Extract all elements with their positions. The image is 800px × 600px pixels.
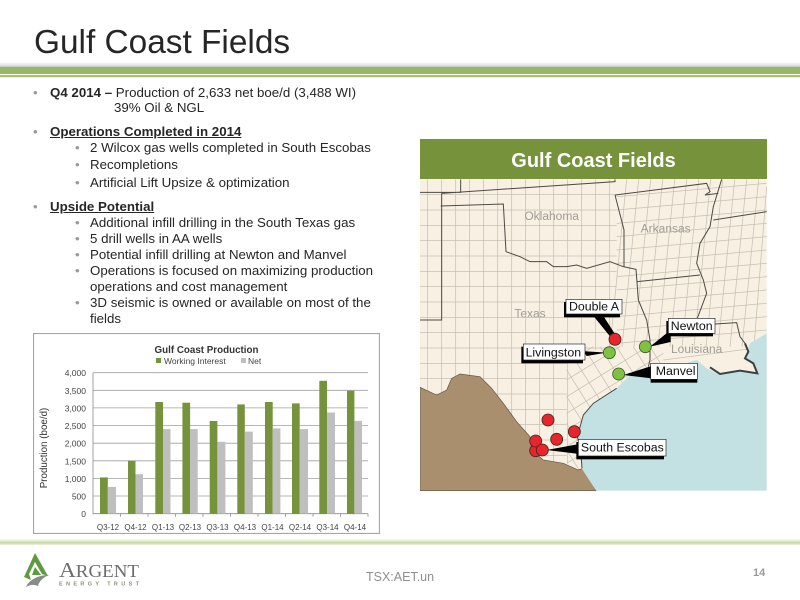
y axis labels (65, 368, 86, 519)
x axis labels: Q3-14 (316, 523, 339, 532)
y axis labels: 2,500 (65, 421, 86, 431)
bullet: Operations Completed in 2014: • (75, 140, 80, 155)
bullet: Upside Potential: • (75, 247, 80, 262)
text block: bullets (33, 85, 373, 326)
y axis title: Production (boe/d) (39, 408, 50, 488)
y axis labels: 0 (81, 509, 86, 519)
field markers: red (530, 333, 621, 457)
callout: Manvel: Manvel (656, 364, 696, 378)
x axis labels (97, 523, 367, 532)
map heading: Gulf Coast Fields (511, 150, 676, 172)
state borders (420, 179, 767, 367)
header divider band (0, 62, 800, 78)
wordmark: ARGENT (59, 558, 139, 582)
map heading (420, 139, 767, 179)
bullet: Upside Potential: Additional infill drilling in the South Texas gas (90, 215, 355, 230)
legend: Net (248, 356, 262, 366)
bullet: Upside Potential: Operations is focused on maximizing production (90, 263, 373, 278)
chart title: Gulf Coast Production (155, 345, 258, 356)
state labels: Louisiana (671, 342, 723, 356)
state labels: Oklahoma (524, 209, 579, 223)
bullet: Upside Potential (33, 199, 373, 326)
icon: logo mark (24, 553, 49, 587)
x axis labels: Q1-13 (152, 523, 175, 532)
y axis labels: 2,000 (65, 438, 86, 448)
bullet: Operations Completed in 2014: Operations Completed in 2014 (50, 124, 241, 139)
bullet: Operations Completed in 2014: • (75, 157, 80, 172)
state labels: Arkansas (641, 222, 691, 236)
callout: Livingston (521, 344, 607, 363)
bullet: Upside Potential: 5 drill wells in AA wells (90, 231, 222, 246)
bar chart: Gulf Coast Production (33, 333, 380, 534)
tagline: ENERGY TRUST (59, 582, 140, 588)
y axis labels: 3,000 (65, 404, 86, 414)
x axis labels: Q1-14 (261, 523, 284, 532)
callout: Double A (564, 299, 622, 338)
bullet: Q4 2014: Q4 2014 – Production of 2,633 net boe/d (3,488 WI) (50, 85, 356, 100)
bullet: Operations Completed in 2014 (33, 124, 371, 190)
bullet: Q4 2014: 39% Oil & NGL (114, 100, 204, 115)
bullet: Q4 2014 (33, 85, 356, 115)
Gulf of Mexico (577, 333, 767, 491)
y axis labels: 500 (72, 492, 86, 502)
bullet: Upside Potential: Potential infill drilling at Newton and Manvel (90, 247, 346, 262)
bullet: Upside Potential: 3D seismic is owned or available on most of the (90, 295, 371, 310)
ticker: TSX:AET.un (366, 570, 434, 584)
bullet: Q4 2014: • (33, 85, 38, 100)
callout: Double A: Double A (569, 300, 620, 314)
x axis labels: Q4-12 (124, 523, 147, 532)
state labels (514, 209, 723, 356)
callout: Newton (650, 318, 715, 347)
bullet: Upside Potential: fields (90, 311, 121, 326)
page number: 14 (753, 567, 765, 579)
y axis labels: 3,500 (65, 386, 86, 396)
bullet: Upside Potential: operations and cost management (90, 279, 287, 294)
bullet: Upside Potential: • (75, 295, 80, 310)
x axis labels: Q4-14 (344, 523, 367, 532)
callout: Manvel (623, 363, 697, 383)
bullet: Operations Completed in 2014: Recompletions (90, 157, 178, 172)
callout: South Escobas (547, 439, 666, 459)
state labels: Texas (514, 307, 546, 321)
legend: Working Interest (164, 356, 226, 366)
y axis labels: 1,000 (65, 474, 86, 484)
logo: Argent Energy Trust (24, 553, 140, 588)
legend (156, 356, 262, 366)
callout: South Escobas: South Escobas (581, 440, 664, 454)
x axis labels: Q3-12 (97, 523, 120, 532)
bullet: Upside Potential: Upside Potential (50, 199, 154, 214)
y axis labels: 1,500 (65, 456, 86, 466)
x axis labels: Q4-13 (234, 523, 257, 532)
x axis labels: Q3-13 (206, 523, 229, 532)
bullet: Operations Completed in 2014: • (33, 124, 38, 139)
bullet: Operations Completed in 2014: 2 Wilcox gas wells completed in South Escobas (90, 140, 371, 155)
bullet: Upside Potential: • (75, 231, 80, 246)
bullet: Upside Potential: • (75, 263, 80, 278)
bullet: Upside Potential: • (75, 215, 80, 230)
x axis labels: Q2-14 (289, 523, 312, 532)
bullet: Operations Completed in 2014: Artificial Lift Upsize & optimization (90, 175, 290, 190)
footer divider band (0, 539, 800, 545)
x axis labels: Q2-13 (179, 523, 202, 532)
land (420, 179, 767, 491)
map panel: Gulf Coast Fields (420, 139, 767, 491)
Mexico (420, 374, 596, 491)
callout: Livingston: Livingston (526, 345, 581, 359)
y axis labels: 4,000 (65, 368, 86, 378)
title: Gulf Coast Fields (34, 24, 290, 61)
bullet: Operations Completed in 2014: • (75, 175, 80, 190)
callout: Newton: Newton (671, 319, 713, 333)
bullet: Upside Potential: • (33, 199, 38, 214)
field markers: green (603, 341, 651, 380)
